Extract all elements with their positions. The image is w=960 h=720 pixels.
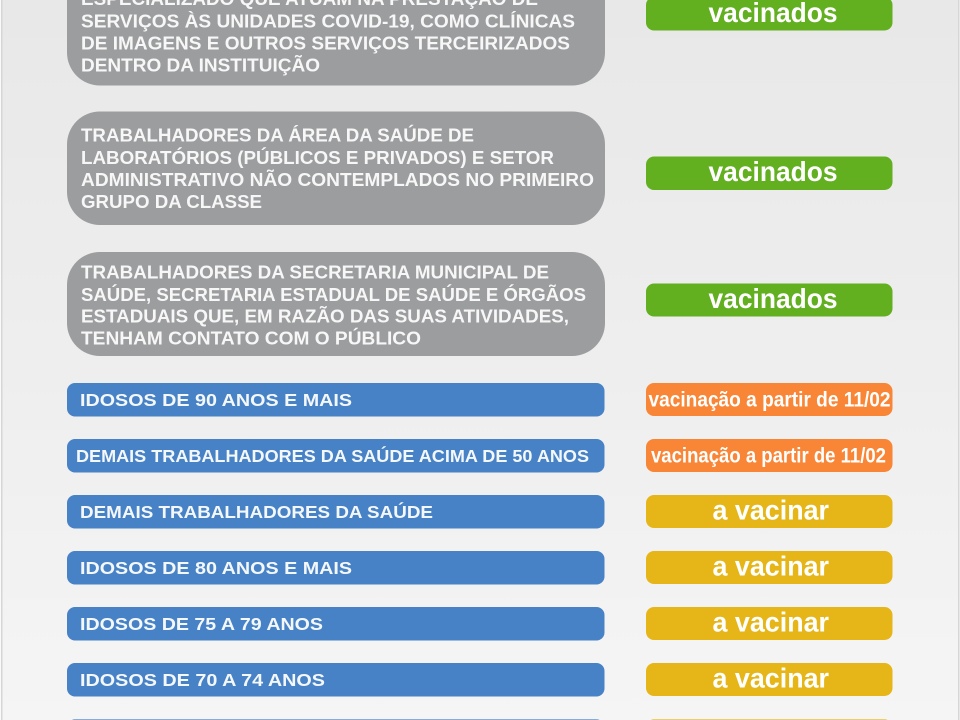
panel: laboratory and outsourced services group: DENTRO DA INSTITUIÇÃO xyxy=(81,54,320,76)
status: a vacinar 3: a vacinar xyxy=(712,606,829,638)
status: a vacinar 1 xyxy=(646,494,892,528)
panel: laboratory and administrative workers: TRABALHADORES DA ÁREA DA SAÚDE DE xyxy=(81,124,474,146)
panel: municipal and state health secretariat workers: TRABALHADORES DA SECRETARIA MUNICIPAL DE xyxy=(81,262,549,282)
panel: municipal and state health secretariat workers: ESTADUAIS QUE, EM RAZÃO DAS SUAS ATIVIDADES, xyxy=(81,306,569,326)
panel: laboratory and administrative workers xyxy=(67,112,605,225)
row label: idosos de 75 a 79 anos xyxy=(67,607,604,640)
status: vacinação a partir de 11/02 (1) xyxy=(646,383,892,416)
panel: municipal and state health secretariat workers: TENHAM CONTATO COM O PÚBLICO xyxy=(81,328,421,348)
row label: idosos de 80 anos e mais: IDOSOS DE 80 ANOS E MAIS xyxy=(80,558,352,578)
status: vacinados 3 xyxy=(646,283,892,316)
row label: idosos de 80 anos e mais xyxy=(67,551,604,584)
row label: demais trabalhadores acima de 50 anos: DEMAIS TRABALHADORES DA SAÚDE ACIMA DE 50 ANOS xyxy=(76,445,589,466)
status: a vacinar 2: a vacinar xyxy=(712,550,829,582)
status: vacinados 2: vacinados xyxy=(708,156,838,187)
panel: municipal and state health secretariat workers xyxy=(67,252,605,356)
status: vacinados 2 xyxy=(646,156,892,190)
status: a vacinar 3 xyxy=(646,606,892,640)
panel: laboratory and administrative workers: LABORATÓRIOS (PÚBLICOS E PRIVADOS) E SETOR xyxy=(81,147,554,168)
panel: laboratory and outsourced services group xyxy=(67,0,605,86)
panel: municipal and state health secretariat workers: SAÚDE, SECRETARIA ESTADUAL DE SAÚDE E ÓRGÃOS xyxy=(81,284,586,305)
row label: idosos de 70 a 74 anos xyxy=(67,663,604,696)
row label: demais trabalhadores da saúde xyxy=(67,495,604,528)
panel: laboratory and administrative workers: ADMINISTRATIVO NÃO CONTEMPLADOS NO PRIMEIRO xyxy=(81,169,594,190)
row label: idosos de 90 anos e mais: IDOSOS DE 90 ANOS E MAIS xyxy=(80,390,352,410)
status: a vacinar 2 xyxy=(646,550,892,584)
status: vacinados 3: vacinados xyxy=(708,283,838,314)
status: a vacinar 1: a vacinar xyxy=(712,494,829,526)
status: vacinação a partir de 11/02 (1): vacinação a partir de 11/02 xyxy=(648,388,890,412)
panel: laboratory and outsourced services group: DE IMAGENS E OUTROS SERVIÇOS TERCEIRIZADOS xyxy=(81,34,570,54)
row label: idosos de 90 anos e mais xyxy=(67,383,604,416)
row label: demais trabalhadores acima de 50 anos xyxy=(67,439,604,472)
row label: demais trabalhadores da saúde: DEMAIS TRABALHADORES DA SAÚDE xyxy=(80,501,433,522)
status: a vacinar 4 xyxy=(646,662,892,696)
row label: idosos de 75 a 79 anos: IDOSOS DE 75 A 79 ANOS xyxy=(80,614,323,634)
row label: idosos de 70 a 74 anos: IDOSOS DE 70 A 74 ANOS xyxy=(80,670,325,690)
panel: laboratory and outsourced services group: SERVIÇOS ÀS UNIDADES COVID-19, COMO CLÍNICAS xyxy=(81,10,575,32)
status: vacinação a partir de 11/02 (2): vacinação a partir de 11/02 xyxy=(651,444,886,468)
next status pill, cropped at the bottom edge xyxy=(646,719,892,720)
next row label, cropped at the bottom edge xyxy=(67,719,604,720)
status: vacinação a partir de 11/02 (2) xyxy=(646,439,892,472)
status: vacinados 1 xyxy=(646,0,892,30)
status: a vacinar 4: a vacinar xyxy=(712,662,829,694)
panel: laboratory and administrative workers: GRUPO DA CLASSE xyxy=(81,192,262,212)
